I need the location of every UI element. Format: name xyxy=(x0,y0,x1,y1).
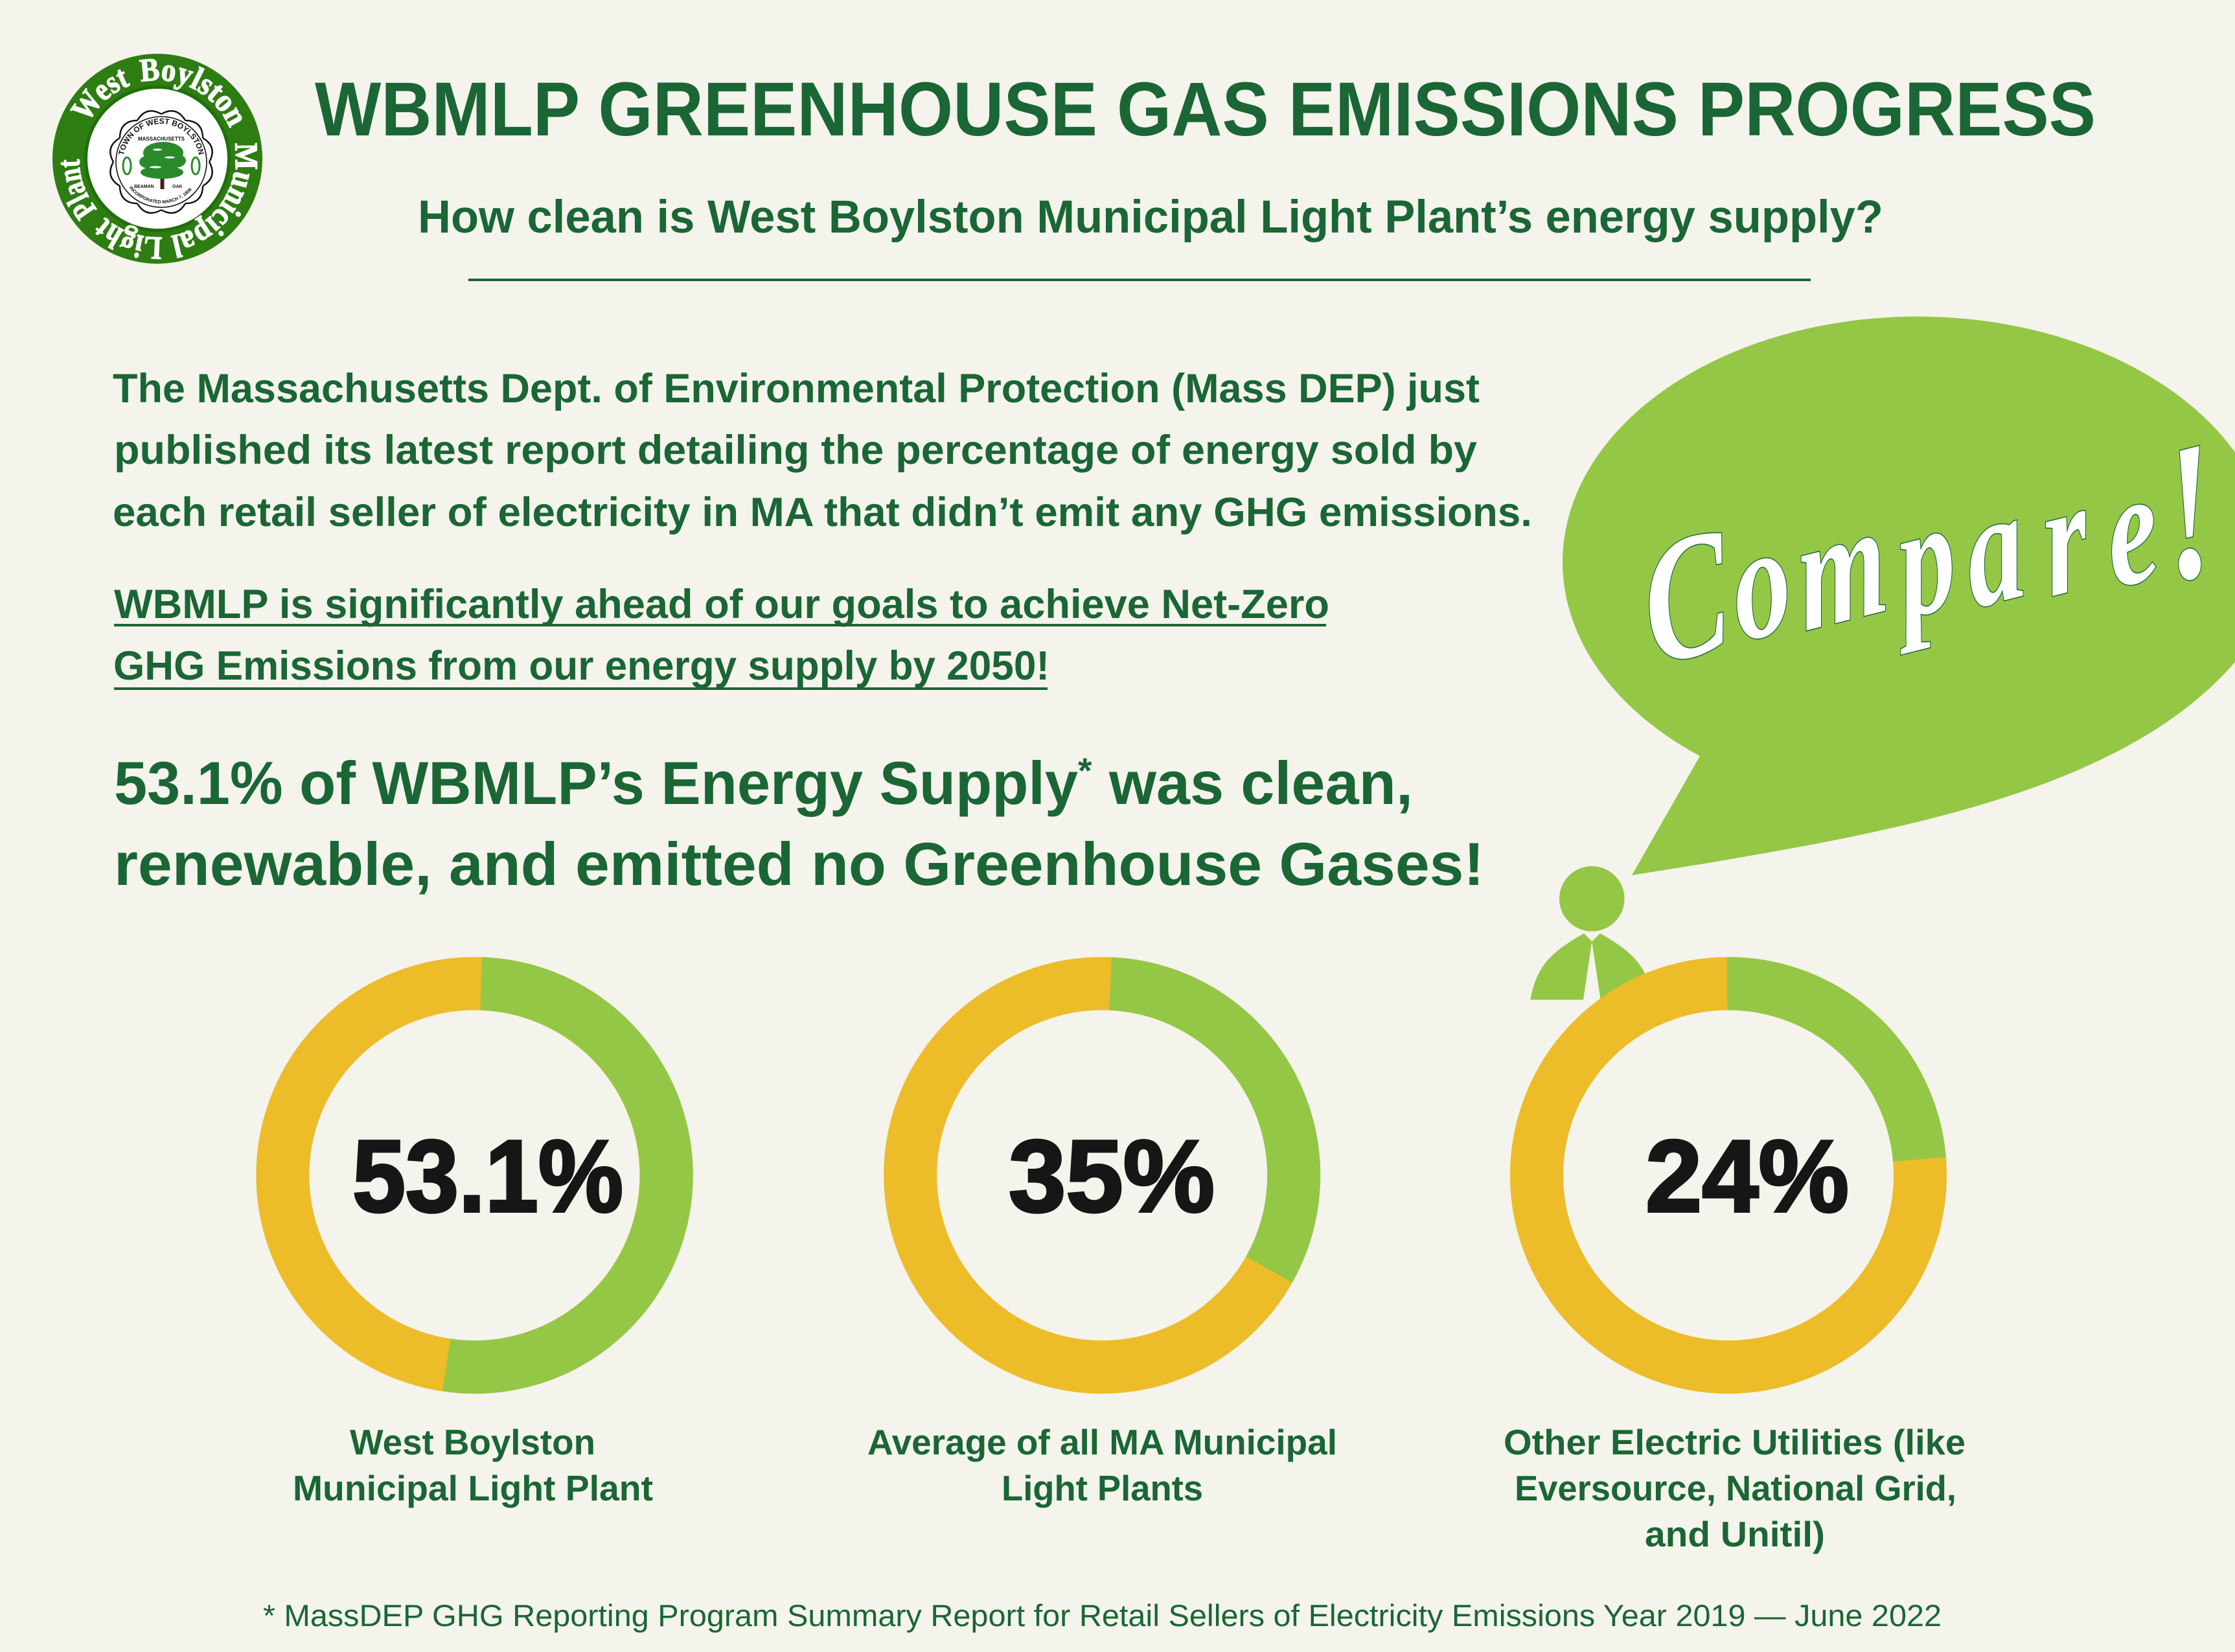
logo: West Boylston Municipal Light Plant seal: Light xyxy=(95,218,162,259)
headline: 53.1% clean energy statement: renewable, and emitted no Greenhouse Gases! xyxy=(114,830,1484,898)
text block: introduction xyxy=(113,366,1532,535)
text block: introduction: The Massachusetts Dept. of Environmental Protection (Mass DEP) just xyxy=(113,366,1480,411)
label: other electric utilities: Other Electric Utilities (like xyxy=(1504,1422,1966,1462)
donut chart: other utilities 24% xyxy=(1537,983,1920,1367)
headline: 53.1% clean energy statement: was clean, xyxy=(1108,749,1413,817)
text block: introduction: each retail seller of electricity in MA that didn’t emit any GHG emissions. xyxy=(113,490,1532,535)
label: other electric utilities: and Unitil) xyxy=(1645,1514,1825,1554)
headline: 53.1% clean energy statement: * xyxy=(1078,750,1092,790)
logo: West Boylston Municipal Light Plant seal: Plant xyxy=(61,159,97,222)
logo: West Boylston Municipal Light Plant seal: TOWN OF WEST BOYLSTON xyxy=(118,118,204,155)
speech bubble with Compare!: C xyxy=(1633,489,1740,704)
label: other electric utilities: Eversource, National Grid, xyxy=(1515,1468,1956,1508)
label: MA municipal average xyxy=(867,1422,1337,1508)
logo: West Boylston Municipal Light Plant seal xyxy=(52,54,262,264)
speech bubble with Compare!: ! xyxy=(2149,399,2228,625)
subtitle: How clean is West Boylston Municipal Light Plant’s energy supply? xyxy=(418,192,1883,243)
text block: underlined goal statement: GHG Emissions from our energy supply by 2050! xyxy=(113,643,1049,689)
headline: 53.1% clean energy statement: 53.1% of WBMLP’s Energy Supply xyxy=(114,749,1078,817)
label: other electric utilities xyxy=(1504,1422,1966,1554)
text block: underlined goal statement xyxy=(113,582,1329,690)
footnote: * MassDEP GHG Reporting Program Summary Report for Retail Sellers of Electricity Emissions Year 2019 — June 2022 xyxy=(263,1598,1942,1633)
speech bubble with Compare! xyxy=(1563,317,2235,875)
donut chart: West Boylston 53.1%: 53.1% xyxy=(352,1119,623,1233)
icon: person xyxy=(1530,866,1653,1000)
donut chart: West Boylston 53.1% xyxy=(282,983,667,1367)
text block: introduction: published its latest report detailing the percentage of energy sold by xyxy=(114,428,1477,473)
logo: West Boylston Municipal Light Plant seal: INCORPORATED MARCH 7, 1808 xyxy=(130,186,192,203)
title: WBMLP GREENHOUSE GAS EMISSIONS PROGRESS xyxy=(315,67,2096,152)
label: West Boylston: West Boylston xyxy=(350,1422,595,1462)
speech bubble with Compare!: ompare xyxy=(1722,434,2167,677)
donut chart: MA municipal average 35% xyxy=(910,983,1294,1367)
label: MA municipal average: Light Plants xyxy=(1002,1468,1203,1508)
logo: West Boylston Municipal Light Plant seal: West xyxy=(70,69,131,117)
logo: West Boylston Municipal Light Plant seal: Municipal xyxy=(170,143,258,258)
label: MA municipal average: Average of all MA Municipal xyxy=(867,1422,1337,1462)
headline: 53.1% clean energy statement xyxy=(114,749,1484,898)
logo: West Boylston Municipal Light Plant seal: BEAMAN xyxy=(134,185,154,189)
donut chart: MA municipal average 35%: 35% xyxy=(1009,1119,1215,1233)
label: West Boylston xyxy=(293,1422,653,1508)
label: West Boylston: Municipal Light Plant xyxy=(293,1468,653,1508)
logo: West Boylston Municipal Light Plant seal: OAK xyxy=(172,185,183,189)
logo: West Boylston Municipal Light Plant seal: MASSACHUSETTS xyxy=(138,136,185,142)
donut chart: other utilities 24%: 24% xyxy=(1645,1119,1849,1233)
text block: underlined goal statement: WBMLP is significantly ahead of our goals to achieve Net-Zero xyxy=(114,582,1329,627)
logo: West Boylston Municipal Light Plant seal: Boylston xyxy=(139,58,242,128)
